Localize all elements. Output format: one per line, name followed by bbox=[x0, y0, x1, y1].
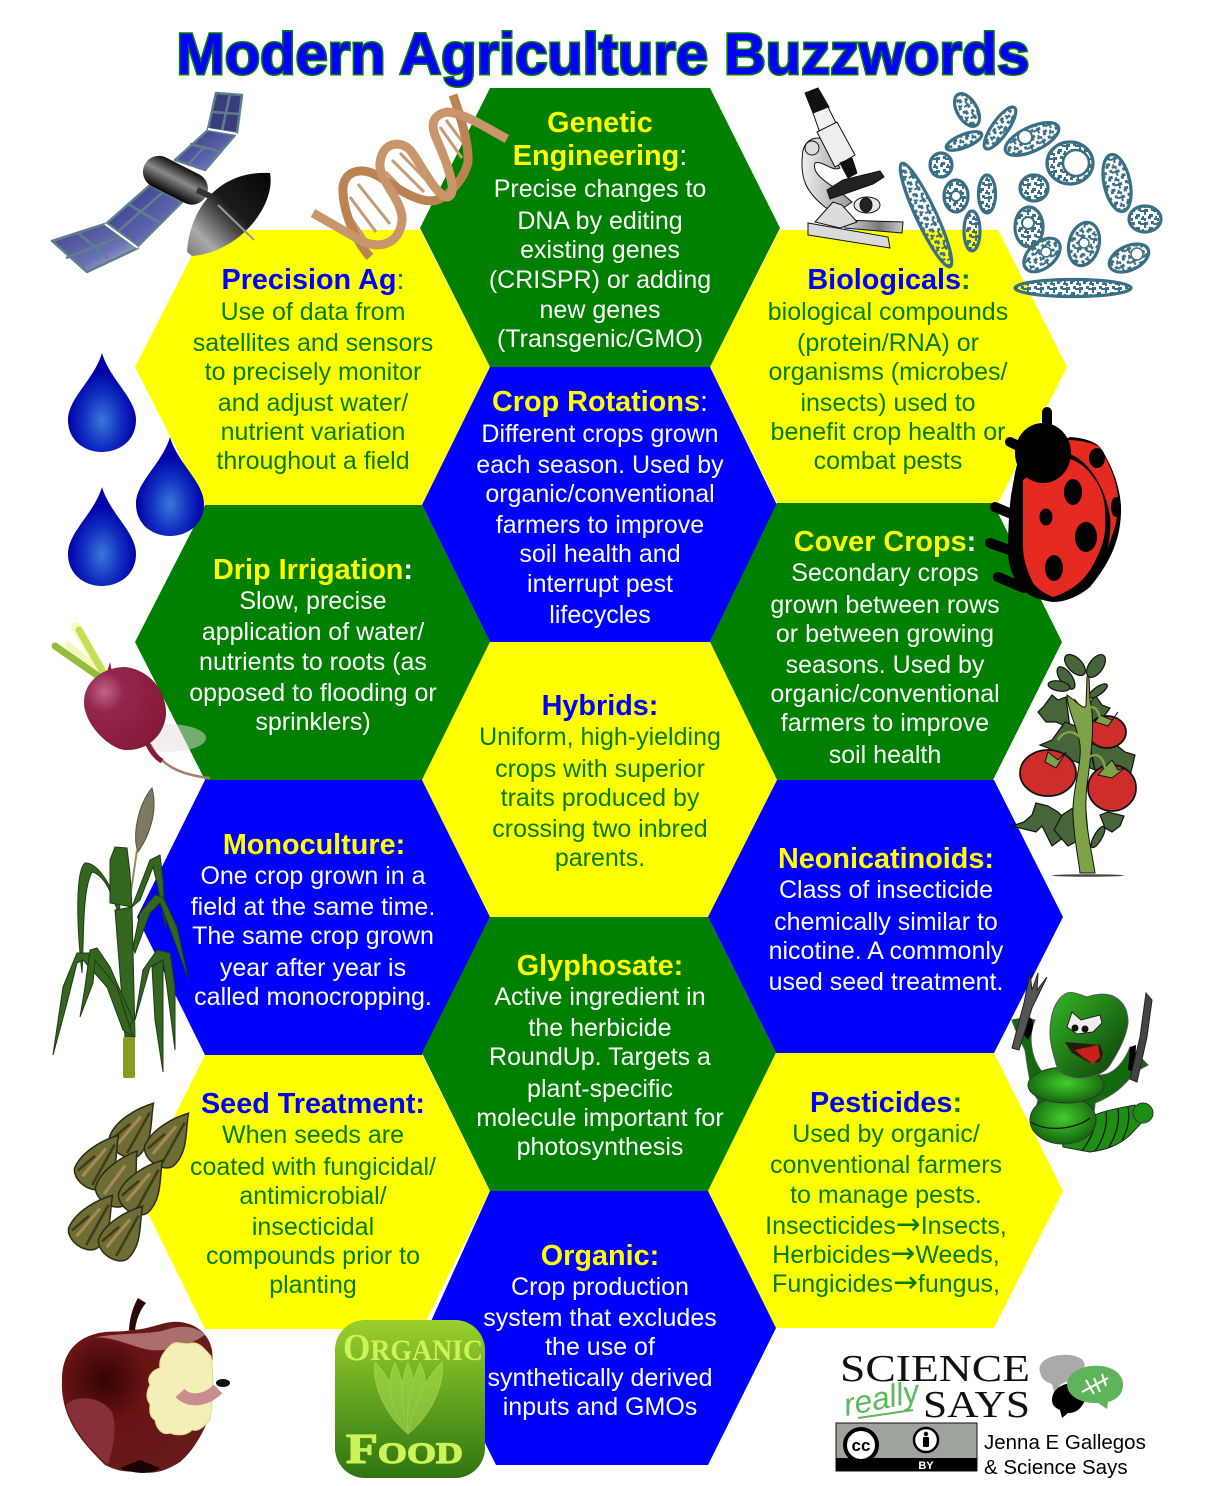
text: pesticides: to manage pests. bbox=[790, 1181, 982, 1209]
text: genetic engineering: new genes bbox=[540, 296, 660, 324]
text: seed treatment: planting bbox=[269, 1271, 357, 1299]
text: drip irrigation: nutrients to roots (as bbox=[199, 648, 427, 676]
text: drip irrigation: application of water/ bbox=[202, 618, 424, 646]
icon: creative commons badge: BY bbox=[918, 1460, 934, 1472]
text: crop rotations: each season. Used by bbox=[476, 451, 724, 479]
text: precision ag: throughout a field bbox=[216, 447, 410, 475]
text: organic: system that excludes bbox=[483, 1304, 717, 1332]
heading: neonicatinoids: Neonicatinoids: bbox=[778, 843, 994, 875]
panel: hybrids bbox=[422, 642, 777, 917]
panel: monoculture bbox=[137, 780, 490, 1055]
heading: biologicals: Biologicals: bbox=[807, 264, 971, 296]
icon: creative commons badge: cc bbox=[852, 1436, 870, 1455]
text: genetic engineering: (CRISPR) or adding bbox=[489, 266, 711, 294]
text: cover crops: Secondary crops bbox=[791, 559, 979, 587]
text: hybrids: crops with superior bbox=[495, 755, 705, 783]
text: monoculture: year after year is bbox=[220, 954, 406, 982]
text: biologicals: biological compounds bbox=[768, 298, 1008, 326]
text: genetic engineering: existing genes bbox=[520, 236, 680, 264]
text: crop rotations: farmers to improve bbox=[496, 511, 704, 539]
label: organic: ORGANIC bbox=[343, 1327, 483, 1369]
text: crop rotations: organic/conventional bbox=[485, 480, 715, 508]
logo: science really says bbox=[840, 1348, 1123, 1426]
text: pesticides: conventional farmers bbox=[770, 1151, 1002, 1179]
icon: water drop 2 bbox=[136, 437, 204, 536]
icon: grass plant bbox=[53, 788, 188, 1078]
text: drip irrigation: Slow, precise bbox=[239, 587, 387, 615]
label: says: SAYS bbox=[923, 1384, 1030, 1426]
text: neonicatinoids: nicotine. A commonly bbox=[769, 937, 1004, 965]
text: genetic engineering: Precise changes to bbox=[494, 175, 706, 203]
text: organic: synthetically derived bbox=[487, 1364, 713, 1392]
heading: genetic engineering: Engineering: bbox=[513, 140, 687, 172]
text: biologicals: benefit crop health or bbox=[771, 418, 1005, 446]
heading: crop rotations: Crop Rotations: bbox=[492, 386, 708, 418]
text: monoculture: One crop grown in a bbox=[200, 862, 426, 890]
text: precision ag: nutrient variation bbox=[221, 418, 405, 446]
icon: water drop 3 bbox=[68, 487, 136, 586]
icon: tomato plant bbox=[1012, 651, 1136, 877]
icon: satellite bbox=[52, 93, 271, 272]
text: glyphosate: the herbicide bbox=[528, 1014, 672, 1042]
heading: cover crops: Cover Crops: bbox=[794, 526, 976, 558]
text: monoculture: The same crop grown bbox=[192, 922, 434, 950]
text: organic: inputs and GMOs bbox=[503, 1393, 697, 1421]
icon: apple with worm bbox=[62, 1298, 230, 1473]
panel: crop rotations bbox=[422, 367, 777, 642]
icon: DNA helix bbox=[313, 95, 507, 257]
text: organic: Crop production bbox=[511, 1273, 689, 1301]
text: glyphosate: plant-specific bbox=[527, 1075, 673, 1103]
text: pesticides: Insecticides→Insects, bbox=[765, 1207, 1007, 1242]
text: crop rotations: soil health and bbox=[519, 540, 681, 568]
text: drip irrigation: opposed to flooding or bbox=[189, 679, 437, 707]
text: biologicals: combat pests bbox=[814, 447, 962, 475]
icon: organic food badge bbox=[335, 1320, 485, 1478]
icon: water drop bbox=[68, 353, 204, 586]
text: genetic engineering: DNA by editing bbox=[517, 207, 683, 235]
icon: hungry caterpillar bbox=[1012, 973, 1153, 1152]
text: pesticides: Used by organic/ bbox=[792, 1120, 980, 1148]
text: precision ag: to precisely monitor bbox=[205, 358, 421, 386]
text: biologicals: organisms (microbes/ bbox=[769, 358, 1008, 386]
credit text: & Science Says bbox=[984, 1456, 1128, 1479]
text: seed treatment: insecticidal bbox=[252, 1213, 374, 1241]
label: really: really bbox=[840, 1373, 924, 1423]
text: precision ag: satellites and sensors bbox=[193, 329, 433, 357]
text: cover crops: grown between rows bbox=[770, 591, 1000, 619]
text: crop rotations: Different crops grown bbox=[481, 420, 719, 448]
heading: hybrids: Hybrids: bbox=[542, 690, 658, 722]
text: cover crops: soil health bbox=[829, 741, 941, 769]
text: precision ag: Use of data from bbox=[221, 298, 405, 326]
text: neonicatinoids: Class of insecticide bbox=[779, 876, 993, 904]
panel: precision ag bbox=[135, 230, 490, 505]
icon: bacteria bbox=[893, 89, 1161, 296]
heading: organic: Organic: bbox=[541, 1240, 659, 1272]
panel: pesticides bbox=[708, 1053, 1063, 1328]
text: hybrids: traits produced by bbox=[501, 784, 700, 812]
icon: ladybug bbox=[990, 412, 1121, 602]
text: organic: the use of bbox=[545, 1333, 655, 1361]
icon: beet bbox=[55, 627, 210, 778]
text: crop rotations: interrupt pest bbox=[527, 570, 673, 598]
credit text: Jenna E Gallegos bbox=[984, 1431, 1146, 1454]
text: pesticides: Herbicides→Weeds, bbox=[772, 1236, 1000, 1271]
text: monoculture: field at the same time. bbox=[191, 893, 435, 921]
panel: seed treatment bbox=[137, 1055, 490, 1329]
icon: microscope bbox=[802, 88, 903, 248]
text: glyphosate: RoundUp. Targets a bbox=[489, 1043, 711, 1071]
text: hybrids: parents. bbox=[555, 844, 645, 872]
text: seed treatment: antimicrobial/ bbox=[239, 1182, 387, 1210]
text: seed treatment: coated with fungicidal/ bbox=[190, 1153, 436, 1181]
panel: glyphosate bbox=[422, 917, 776, 1191]
label: food: FOOD bbox=[346, 1427, 463, 1473]
heading: glyphosate: Glyphosate: bbox=[517, 950, 683, 982]
text: crop rotations: lifecycles bbox=[549, 601, 651, 629]
text: precision ag: and adjust water/ bbox=[218, 389, 408, 417]
label: science: SCIENCE bbox=[840, 1348, 1030, 1390]
text: monoculture: called monocropping. bbox=[194, 983, 432, 1011]
text: seed treatment: compounds prior to bbox=[206, 1242, 420, 1270]
heading: genetic engineering: Genetic bbox=[547, 107, 653, 139]
heading: precision ag: Precision Ag: bbox=[222, 264, 404, 296]
title: Modern Agriculture Buzzwords bbox=[176, 22, 1030, 87]
heading: pesticides: Pesticides: bbox=[810, 1087, 962, 1119]
text: biologicals: (protein/RNA) or bbox=[797, 329, 979, 357]
text: cover crops: or between growing bbox=[776, 620, 994, 648]
text: glyphosate: photosynthesis bbox=[517, 1133, 683, 1161]
text: neonicatinoids: chemically similar to bbox=[774, 908, 998, 936]
icon: speech bubbles bbox=[1040, 1355, 1123, 1418]
text: genetic engineering: (Transgenic/GMO) bbox=[497, 325, 703, 353]
text: cover crops: seasons. Used by bbox=[786, 651, 985, 679]
text: seed treatment: When seeds are bbox=[222, 1121, 404, 1149]
text: glyphosate: Active ingredient in bbox=[494, 983, 706, 1011]
text: hybrids: Uniform, high-yielding bbox=[479, 723, 721, 751]
panel: drip irrigation bbox=[135, 505, 490, 780]
panel: cover crops bbox=[710, 503, 1062, 780]
text: cover crops: organic/conventional bbox=[770, 680, 1000, 708]
heading: seed treatment: Seed Treatment: bbox=[201, 1088, 425, 1120]
text: hybrids: crossing two inbred bbox=[492, 815, 708, 843]
text: drip irrigation: sprinklers) bbox=[255, 708, 371, 736]
text: cover crops: farmers to improve bbox=[781, 709, 989, 737]
heading: drip irrigation: Drip Irrigation: bbox=[213, 554, 413, 586]
text: pesticides: Fungicides→fungus, bbox=[772, 1265, 1000, 1300]
panel: organic bbox=[428, 1191, 776, 1465]
panel: genetic engineering bbox=[420, 88, 780, 367]
text: neonicatinoids: used seed treatment. bbox=[769, 968, 1003, 996]
text: biologicals: insects) used to bbox=[800, 389, 976, 417]
icon: seeds bbox=[63, 1093, 203, 1267]
text: glyphosate: molecule important for bbox=[476, 1104, 724, 1132]
panel: neonicatinoids bbox=[708, 780, 1063, 1053]
icon: creative commons badge bbox=[836, 1423, 977, 1472]
panel: biologicals bbox=[710, 230, 1067, 503]
heading: monoculture: Monoculture: bbox=[223, 829, 405, 861]
